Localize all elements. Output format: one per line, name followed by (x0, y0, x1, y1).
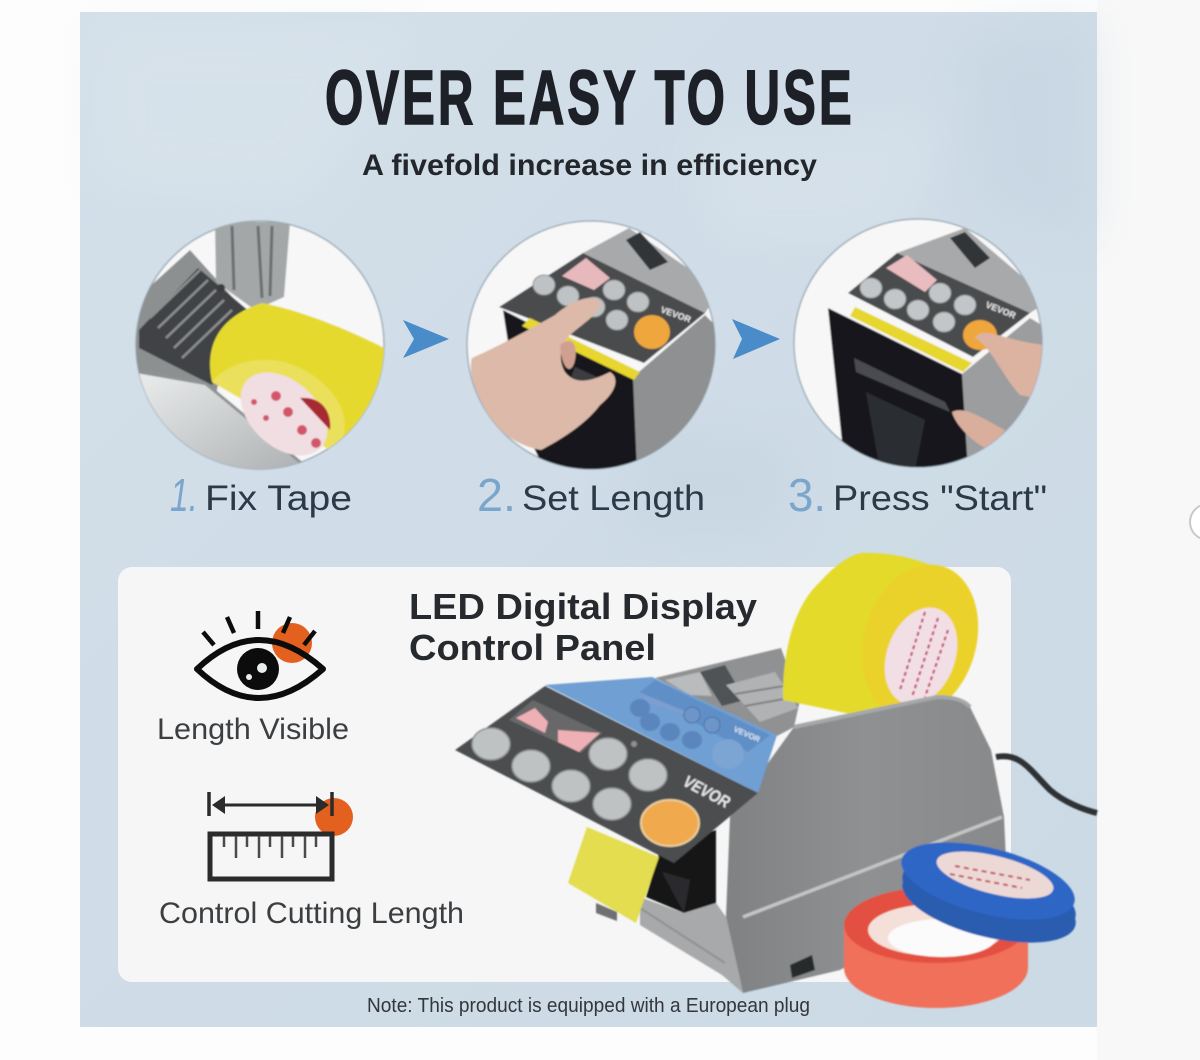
blue tape roll (894, 827, 1083, 958)
icon: eye (197, 611, 323, 698)
tape dispenser product image: VEVOR (732, 725, 762, 744)
blue panel zoom band (545, 677, 777, 793)
page margin (1097, 0, 1200, 1060)
label: control cutting length: Control Cutting Length (159, 897, 464, 930)
yellow tape strip (568, 827, 659, 923)
step label 3: 3. (788, 469, 826, 521)
heading: LED control panel: Control Panel (409, 627, 656, 668)
heading: LED control panel (409, 586, 757, 668)
machine lower front (640, 897, 743, 993)
machine body (726, 697, 1006, 993)
step label 1: 1. (170, 469, 198, 521)
step label 2: 2. (477, 469, 516, 521)
step label 2 (477, 469, 705, 521)
power cable (996, 756, 1097, 813)
note: Note: This product is equipped with a European plug (367, 995, 810, 1017)
title: OVER EASY TO USE (325, 54, 852, 141)
step label 1 (170, 469, 352, 521)
step 2 photo: set length: VEVOR (659, 304, 693, 325)
subtitle: A fivefold increase in efficiency (362, 149, 817, 182)
red tape roll (844, 887, 1028, 1008)
arrow 2 (732, 319, 780, 359)
step label 3 (788, 469, 1047, 521)
machine port (790, 955, 815, 978)
yellow tape roll (783, 550, 996, 732)
dark control sheet: VEVOR (680, 772, 734, 812)
panel: feature card (118, 567, 1011, 982)
step 1 photo: fix tape (130, 221, 388, 480)
step 3 photo: press start (794, 219, 1050, 470)
label: length visible: Length Visible (157, 713, 349, 746)
step label 1: Fix Tape (205, 479, 352, 518)
step 3 photo: press start: VEVOR (984, 300, 1018, 321)
carousel button edge (1190, 504, 1200, 540)
heading: LED control panel: LED Digital Display (409, 586, 757, 627)
arrow 1 (403, 320, 449, 358)
step label 2: Set Length (522, 479, 705, 518)
dark control sheet (455, 686, 758, 863)
step label 3: Press "Start" (833, 479, 1047, 518)
step 2 photo: set length (467, 221, 720, 470)
tape dispenser product image (455, 550, 1097, 1008)
machine top deck (655, 648, 800, 736)
icon: ruler and arrow (209, 792, 353, 879)
